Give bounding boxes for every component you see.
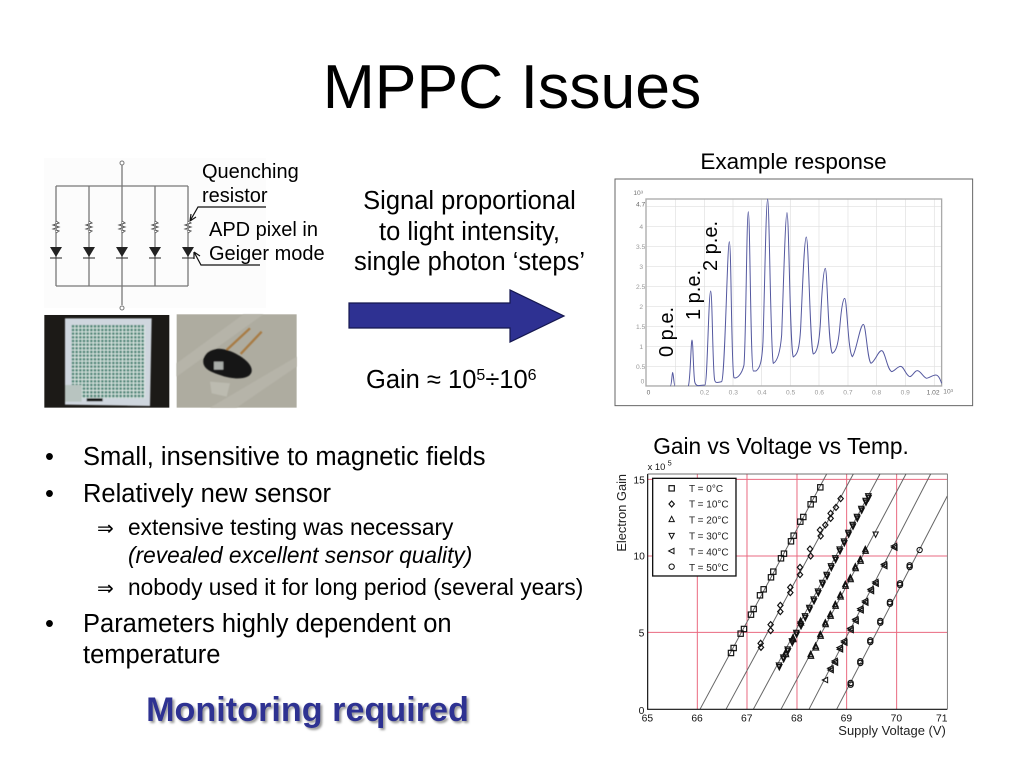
axis tick labels: x 10	[648, 462, 665, 472]
axis labels: 0.5	[786, 389, 796, 396]
bullet: parameters: temperature	[83, 641, 220, 669]
gain formula: 6	[528, 367, 537, 384]
legend: T = 0°C	[689, 484, 723, 495]
sub-bullet: nobody: nobody used it for long period (several years)	[128, 574, 583, 600]
bullet list	[45, 443, 583, 669]
axis labels: 10³	[633, 190, 644, 197]
series: T=30C	[776, 494, 878, 670]
text block: signal description: single photon ‘steps’	[354, 248, 585, 276]
axis labels: 0.4	[757, 389, 767, 396]
bullet: small: •	[45, 443, 54, 471]
axis labels: 1.5	[636, 324, 646, 331]
gain formula: Gain ≈ 10	[366, 366, 476, 394]
sub-bullet: testing: (revealed excellent sensor quality)	[128, 542, 472, 568]
axis tick labels: 10	[633, 552, 645, 563]
axis labels: 0	[647, 389, 651, 396]
bullet: new sensor: •	[45, 480, 54, 508]
legend: T = 40°C	[689, 547, 729, 558]
axis labels: 0.8	[872, 389, 882, 396]
axis labels: 4.7	[636, 202, 646, 209]
axis title: supply voltage: Supply Voltage (V)	[838, 723, 946, 738]
gain formula: ÷10	[485, 366, 528, 394]
icon: APD pixel pointer	[194, 252, 260, 265]
axis labels: 3.5	[636, 244, 646, 251]
series: T=20C	[783, 546, 868, 658]
legend: T = 10°C	[689, 500, 729, 511]
axis tick labels: 67	[741, 714, 753, 725]
icon: quenching resistor pointer	[190, 207, 266, 221]
axis labels: 0.7	[843, 389, 853, 396]
series: T=50C	[848, 547, 922, 687]
legend: T = 50°C	[689, 563, 729, 574]
axis labels: 10³	[943, 388, 954, 395]
axis tick labels: 65	[642, 714, 653, 725]
sub-bullet: testing: ⇒	[97, 516, 114, 540]
axis labels: 2.5	[636, 284, 646, 291]
photo: sensor array	[44, 315, 169, 408]
chart: gain vs voltage vs temperature	[614, 458, 948, 738]
axis tick labels: 66	[691, 714, 703, 725]
axis labels: 1.02	[927, 389, 940, 396]
label: 2 p.e.: 2 p.e.	[700, 221, 722, 271]
sub-bullet: nobody: ⇒	[97, 576, 114, 600]
axis labels: 0	[641, 379, 645, 386]
axis title: electron gain: Electron Gain	[614, 474, 629, 552]
photo: packaged sensor	[177, 314, 297, 408]
axis tick labels	[633, 458, 948, 725]
axis labels: 0.9	[901, 389, 910, 396]
axis labels: 0.5	[636, 364, 646, 371]
callout: monitoring required: Monitoring required	[146, 691, 469, 729]
axis labels: 3	[639, 264, 643, 271]
panel: circuit diagram	[44, 158, 266, 310]
bullet: parameters: •	[45, 610, 54, 638]
axis tick labels: 70	[891, 714, 902, 725]
axis tick labels: 71	[936, 714, 948, 725]
axis tick labels: 5	[639, 628, 645, 639]
sub-bullet: testing: extensive testing was necessary	[128, 514, 454, 540]
axis labels: 2	[639, 304, 643, 311]
bullet: parameters: Parameters highly dependent on	[83, 610, 452, 638]
heading: gain vs voltage: Gain vs Voltage vs Temp.	[653, 433, 909, 459]
bullet: new sensor: Relatively new sensor	[83, 480, 332, 508]
legend: T = 20°C	[689, 516, 729, 527]
series: T=40C	[822, 543, 897, 683]
heading: example response: Example response	[700, 149, 887, 174]
axis tick labels: 68	[791, 714, 803, 725]
axis tick labels: 0	[639, 706, 645, 717]
text block: signal description: to light intensity,	[379, 218, 560, 246]
arrow	[349, 290, 564, 342]
axis tick labels: 69	[841, 714, 852, 725]
legend: T = 30°C	[689, 531, 729, 542]
axis labels: 0.6	[815, 389, 824, 396]
series: T=0C	[728, 485, 823, 656]
chart: example response spectrum	[615, 179, 973, 406]
axis tick labels: 15	[633, 475, 645, 486]
legend	[653, 478, 736, 576]
gain formula: 5	[476, 367, 485, 384]
label: quenching resistor: resistor	[202, 185, 268, 207]
label: APD pixel: Geiger mode	[209, 243, 325, 265]
bullet: small: Small, insensitive to magnetic fields	[83, 443, 486, 471]
label: APD pixel: APD pixel in	[209, 219, 318, 241]
axis labels: 0.2	[700, 389, 710, 396]
axis labels: 4	[639, 224, 643, 231]
title: MPPC Issues	[323, 52, 701, 122]
axis tick labels: 5	[668, 458, 672, 467]
label: 0 p.e.: 0 p.e.	[656, 307, 678, 357]
text block: signal description: Signal proportional	[363, 187, 576, 215]
label: quenching resistor: Quenching	[202, 161, 299, 183]
axis labels: 0.3	[729, 389, 738, 396]
label: 1 p.e.: 1 p.e.	[683, 270, 705, 320]
axis labels: 1	[639, 344, 643, 351]
series: T=10C	[758, 496, 843, 650]
axis labels	[633, 190, 954, 396]
